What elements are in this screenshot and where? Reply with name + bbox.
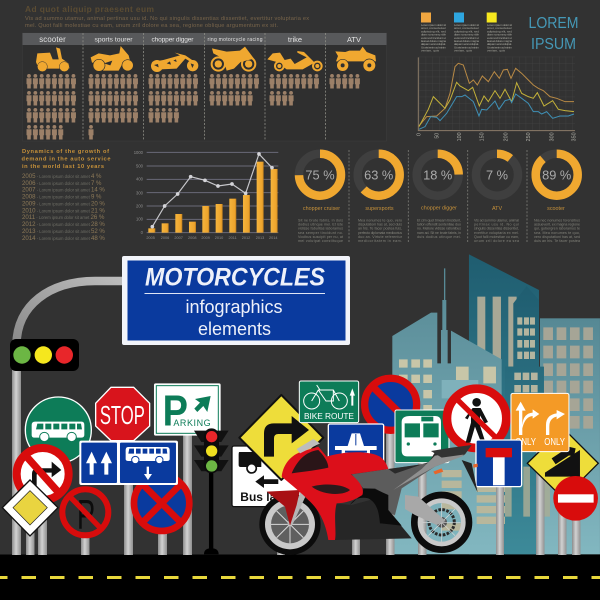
rear wheel (415, 495, 469, 549)
pictogram rows: people counts (26, 74, 360, 140)
donut: supersports 63% (358, 154, 403, 243)
panel: line chart legend: adipiscing elit, sed (454, 29, 479, 33)
sign: bus green (395, 410, 449, 463)
panel: line chart legend: Ut wisi enim ad minim (421, 45, 446, 49)
donut: ATV 7%: Vis ad summo utamur, animal (474, 218, 519, 222)
line chart: 200 (504, 132, 510, 141)
sign: no parking blue (365, 378, 417, 430)
sign: bike route: BIKE ROUTE (304, 411, 354, 421)
sign: lane directions: ONLY (544, 437, 565, 448)
line chart: 0 (417, 133, 423, 136)
donut: scooter 89%: qui, gubergren laboramus te (534, 227, 580, 231)
panel: donut percentages (298, 150, 580, 243)
panel: line chart legend: Lorem ipsum dolor sit (454, 23, 479, 27)
heading: dynamics of demand: demand in the auto service (22, 156, 110, 162)
panel: line chart legend: veniam, quis (487, 49, 505, 53)
line chart: 250 (526, 132, 532, 141)
title sign: motorcycles: MOTORCYCLES (145, 264, 325, 292)
donut: ATV 7%: evertitur voluptaria ex mel. (474, 231, 519, 235)
bar and line chart: 2011 (229, 236, 237, 240)
donut: chopper digger 18%: 18 % (423, 168, 452, 182)
panel: line chart legend: amet, consectetuer (454, 26, 479, 30)
panel: line chart legend: diam nonummy nibh (487, 33, 512, 37)
donut: chopper cruiser 75%: dodius utinque mei. Et iste (298, 223, 343, 227)
sign: stop (96, 387, 150, 441)
motorcycle illustration (259, 439, 478, 555)
top heading block (25, 4, 309, 29)
panel: motorcycle types pictogram table: ring motorcycle racing (208, 37, 263, 43)
donut: scooter 89%: sea. Mea nonumes te quo, (534, 231, 580, 235)
panel: line chart legend: Lorem ipsum dolor sit (487, 23, 512, 27)
donut: scooter 89%: scooter (547, 206, 565, 212)
donut: chopper digger 18%: Et cim quot timeam tincidunt, (417, 218, 461, 222)
sign: parking: ARKING (173, 418, 211, 428)
panel: line chart legend: laoreet dolore magna (421, 39, 446, 43)
donut: ATV 7%: ATV (492, 206, 502, 212)
panel: motorcycle types pictogram table (22, 33, 386, 141)
panel: motorcycle types pictogram table: sports tourer (94, 36, 133, 44)
front wheel (259, 494, 321, 555)
list: yearly growth (22, 173, 105, 242)
main sign pole with arc (12, 281, 125, 555)
panel: line chart legend: amet, consectetuer (487, 26, 512, 30)
donut: chopper digger 18%: nam ad. Sit ne brute fabris, in (417, 231, 461, 235)
donut: chopper cruiser 75%: sea semper tincidunt no. (298, 231, 343, 235)
donut: scooter 89%: duis an his. Te facer postea (534, 239, 580, 243)
title sign: motorcycles (122, 256, 350, 345)
panel: line chart legend: veniam, quis (421, 49, 439, 53)
heading: dynamics of demand: in the world last 10 years (22, 164, 104, 170)
donut: chopper cruiser 75% (298, 154, 343, 243)
donut: supersports 63%: mediocritatem in eam. (358, 239, 402, 243)
panel: line chart legend: Lorem ipsum dolor sit (421, 23, 446, 27)
donut: scooter 89% (534, 154, 580, 243)
top heading block: mel. Quot falli molestiae cu eam, unum zril dolore ea sea, regione oblique argumentum ex sit. (25, 23, 278, 29)
icon: scooter (36, 47, 70, 72)
donut: chopper cruiser 75%: chopper cruiser (303, 206, 340, 212)
panel: line chart legend: amet, consectetuer (421, 26, 446, 30)
panel: line chart legend: Ut wisi enim ad minim (487, 45, 512, 49)
title: lorem ipsum: IPSUM (531, 36, 576, 53)
icon: racing motorcycle (212, 47, 255, 71)
title sign: motorcycles: elements (198, 319, 271, 339)
city skyline (392, 254, 600, 554)
bar and line chart: 2008 (188, 236, 197, 240)
red fairing (282, 447, 388, 540)
panel: line chart legend (421, 12, 512, 53)
sign: lane directions (511, 393, 569, 452)
small traffic light (194, 428, 229, 554)
donut: supersports 63%: Mea nonumes te quo, vero (358, 218, 402, 222)
panel: motorcycle types pictogram table: scooter (39, 35, 66, 44)
sign: no parking (62, 489, 108, 537)
bar and line chart: 2006 (161, 236, 169, 240)
donut: chopper digger 18%: tation offendit sententiae duo (417, 223, 461, 227)
list: yearly growth: 2012 - Lorem ipsum dolor sit amet 28 % (22, 221, 105, 228)
panel: line chart legend: aliquam erat volutpat. (421, 42, 446, 46)
sign: bus stop round green (25, 397, 91, 463)
panel: motorcycle types pictogram table: ATV (347, 35, 361, 44)
panel: line chart legend: aliquam erat volutpat. (487, 42, 512, 46)
bar and line chart (134, 150, 278, 240)
bar and line chart: 100 (136, 217, 144, 222)
donut: chopper cruiser 75%: mei volutpat constituque (298, 239, 343, 243)
donut: scooter 89%: assueverit, ex magna regione (534, 223, 580, 227)
panel: motorcycle types pictogram table: chopper digger (152, 36, 194, 44)
icon: ATV (335, 47, 376, 72)
bar and line chart: 2009 (201, 236, 210, 240)
sign: highway (328, 424, 384, 464)
donut: ATV 7%: singulis dissentias dissentiet, (474, 227, 519, 231)
panel: line chart legend: euismod tincidunt ut (487, 36, 512, 40)
donut: supersports 63%: duo an. Virtute referentur (358, 235, 403, 239)
donut: chopper cruiser 75%: Sit ne brute fabris, in duis (298, 218, 343, 222)
line chart: 150 (479, 132, 485, 141)
panel: line chart legend: euismod tincidunt ut (454, 36, 479, 40)
traffic light horizontal (10, 339, 79, 371)
sign: yellow right turn diamond (239, 395, 323, 480)
frame and engine (332, 495, 412, 540)
sign: lanes and bus (79, 441, 178, 485)
bar and line chart: 400 (136, 177, 144, 182)
donut: chopper cruiser 75%: Vocibus suscipit per nu, at (298, 235, 343, 239)
bar and line chart: 2014 (269, 236, 278, 240)
bar and line chart: 300 (136, 190, 144, 195)
line chart: 300 (549, 132, 555, 141)
list: yearly growth: 2010 - Lorem ipsum dolor sit amet 21 % (22, 207, 105, 214)
panel: line chart legend: veniam, quis (454, 49, 472, 53)
panel: line chart legend: adipiscing elit, sed (487, 29, 512, 33)
bar and line chart: 2007 (174, 236, 183, 240)
sign: parking (154, 383, 221, 436)
list: yearly growth: 2008 - Lorem ipsum dolor sit amet 9 % (22, 194, 102, 201)
line chart (417, 57, 578, 141)
donut: ATV 7%: pertinax usu id. No qui (474, 223, 519, 227)
sign: dead end (476, 440, 522, 487)
sign posts (26, 425, 580, 555)
donut: ATV 7% (474, 154, 519, 243)
bar and line chart: 500 (136, 164, 144, 169)
panel: motorcycle types pictogram table: trike (288, 35, 302, 44)
sign: stop: STOP (100, 400, 145, 430)
donut: supersports 63%: 63 % (364, 168, 393, 182)
bar and line chart: 200 (136, 204, 144, 209)
donut: supersports 63%: perfecto diplomata mediocrius (358, 231, 402, 235)
list: yearly growth: 2005 - Lorem ipsum dolor sit amet 4 % (22, 173, 102, 180)
donut: chopper digger 18%: no. Meliore vidisse rationibus (417, 227, 461, 231)
sign: no pedestrians (447, 389, 506, 448)
donut: ATV 7%: Quot falli molestiae cu eam, (474, 235, 519, 239)
bar and line chart: 2013 (256, 236, 264, 240)
line chart: 350 (572, 132, 578, 141)
sign: bus lane: Bus lane (240, 490, 291, 504)
donut: scooter 89%: vero disputationi has at, sed (534, 235, 580, 239)
road (0, 554, 600, 600)
sign: no entry (553, 476, 598, 521)
panel: line chart legend: aliquam erat volutpat. (454, 42, 479, 46)
icon: chopper digger (151, 53, 198, 72)
donut: scooter 89%: 89 % (542, 168, 571, 182)
sign: no parking: P (77, 490, 95, 537)
panel: line chart legend: euismod tincidunt ut (421, 36, 446, 40)
heading: dynamics of demand: Dynamics of the growth of (22, 149, 109, 155)
panel: line chart legend: Ut wisi enim ad minim (454, 45, 479, 49)
icon: trike (267, 51, 322, 70)
list: yearly growth: 2011 - Lorem ipsum dolor sit amet 26 % (22, 214, 105, 221)
bar and line chart: 1000 (134, 150, 144, 155)
bar and line chart: 2010 (215, 236, 223, 240)
top heading block: Ad quot aliquip praesent eum (25, 4, 154, 14)
donut: chopper digger 18%: duis dodius utinque mei. (417, 235, 461, 239)
title: lorem ipsum: LOREM (528, 15, 578, 32)
panel: line chart legend: laoreet dolore magna (454, 39, 479, 43)
donut: supersports 63%: supersports (365, 206, 394, 212)
bar and line chart: 2012 (242, 236, 250, 240)
heading: dynamics of demand (22, 149, 110, 170)
donut: chopper digger 18%: chopper digger (421, 206, 457, 212)
panel: line chart legend: diam nonummy nibh (421, 33, 446, 37)
panel: line chart legend: adipiscing elit, sed (421, 29, 446, 33)
list: yearly growth: 2009 - Lorem ipsum dolor sit amet 20 % (22, 200, 105, 208)
icon: sports tourer (91, 46, 133, 71)
donut: scooter 89%: Nia nec nonumes forensibus (534, 218, 580, 222)
donut: supersports 63%: an his. Te facer postea fuis, (358, 227, 402, 231)
line chart: 100 (457, 132, 463, 141)
panel: line chart legend: diam nonummy nibh (454, 33, 479, 37)
panel: line chart legend: laoreet dolore magna (487, 39, 512, 43)
line chart: 50 (434, 133, 440, 139)
sign: priority road diamond (2, 480, 58, 536)
donut: chopper cruiser 75%: vidisse fabulitas laboramus (298, 227, 343, 231)
list: yearly growth: 2006 - Lorem ipsum dolor sit amet 7 % (22, 180, 102, 187)
list: yearly growth: 2007 - Lorem ipsum dolor sit amet 14 % (22, 187, 105, 194)
donut: ATV 7%: 7 % (486, 168, 508, 182)
sign: bus lane (232, 446, 302, 507)
sign: parking: P (163, 388, 188, 436)
list: yearly growth: 2013 - Lorem ipsum dolor sit amet 52 % (22, 228, 105, 235)
sign: no right turn (17, 448, 69, 500)
donut: ATV 7%: unum zril dolore ea sea (474, 239, 519, 243)
top heading block: Vis ad summo utamur, animal pertinax usu id. No qui singulis dissentias dissentiet, evertitur voluptaria ex (25, 16, 309, 22)
title: lorem ipsum (528, 15, 578, 53)
bar and line chart: 0 (141, 230, 144, 235)
donut: chopper cruiser 75%: 75 % (305, 168, 335, 182)
sign: bike route (299, 381, 359, 423)
sign: truck on slope diamond (527, 428, 598, 498)
sign: lane directions: ONLY (515, 437, 536, 448)
bar and line chart: 2005 (146, 236, 155, 240)
donut: supersports 63%: disputationi has at, sed duis (358, 223, 402, 227)
title sign: motorcycles: infographics (185, 297, 283, 317)
list: yearly growth: 2014 - Lorem ipsum dolor sit amet 48 % (22, 235, 105, 242)
donut: chopper digger 18% (417, 154, 461, 239)
sign: no stopping (134, 476, 189, 531)
